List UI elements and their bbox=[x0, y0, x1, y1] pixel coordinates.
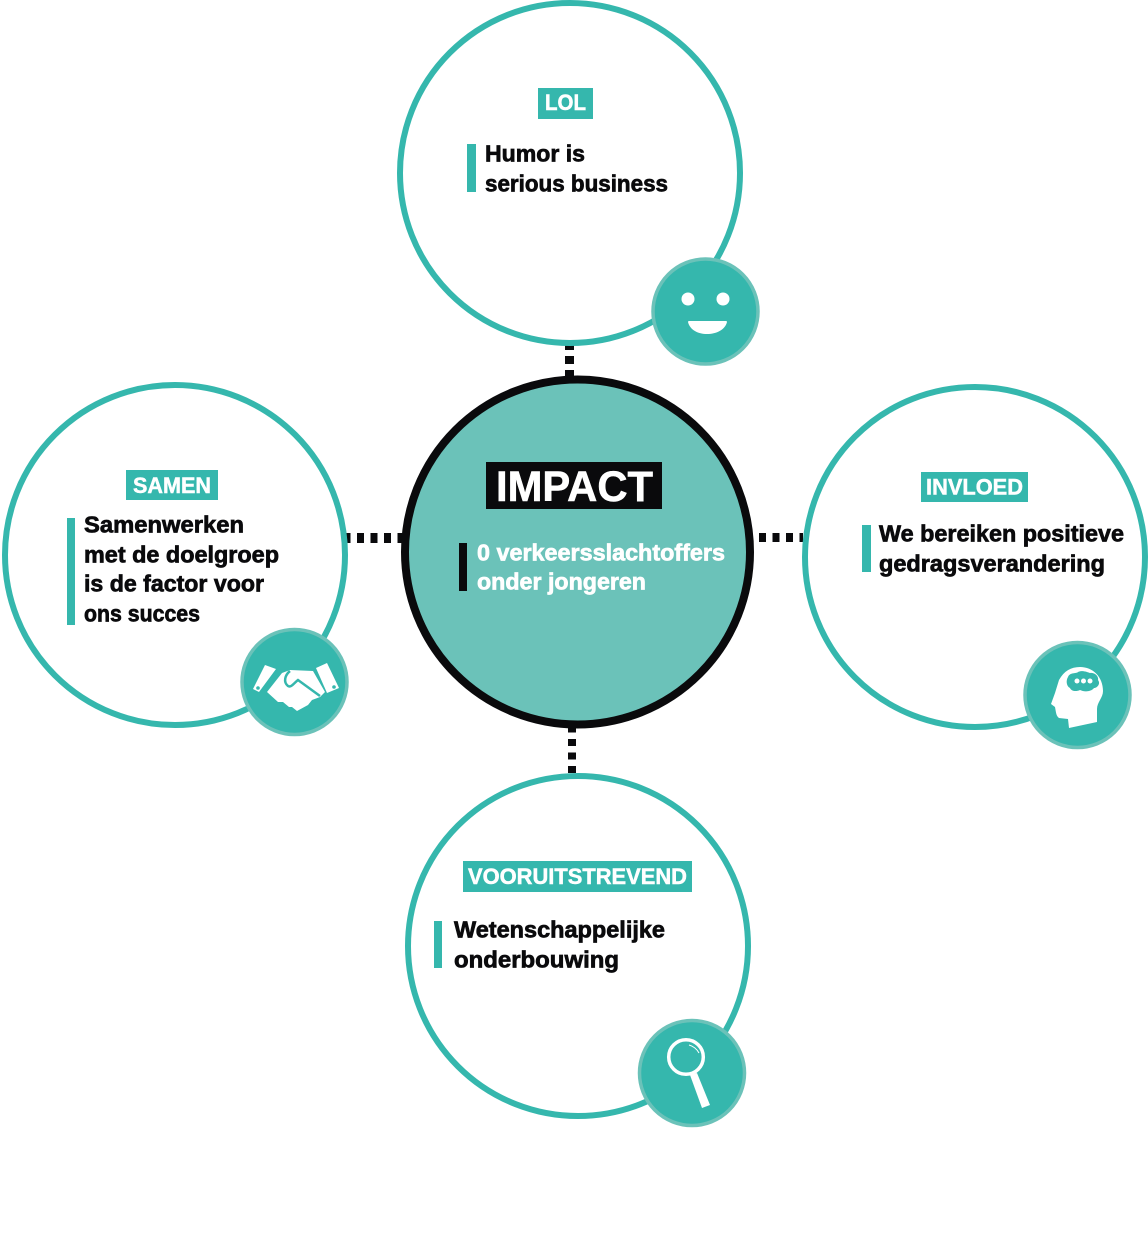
text block: samen bbox=[67, 512, 279, 626]
icon: head with thought bubble bbox=[1025, 642, 1130, 748]
connector: right bbox=[759, 533, 803, 542]
circle outline bbox=[408, 776, 748, 1116]
heading: lol: LOL bbox=[545, 90, 586, 115]
heading: lol bbox=[538, 88, 593, 119]
text block: samen: met de doelgroep bbox=[84, 542, 279, 568]
text block: samen: is de factor voor bbox=[84, 570, 264, 596]
central circle bbox=[405, 380, 750, 724]
panel: vooruitstrevend bbox=[408, 776, 748, 1126]
circle outline bbox=[805, 387, 1145, 727]
text block: invloed: We bereiken positieve bbox=[879, 520, 1124, 546]
text block: impact goal bbox=[459, 540, 725, 594]
connector: left bbox=[344, 533, 403, 543]
text block: invloed bbox=[862, 520, 1124, 576]
text block: lol: serious business bbox=[485, 170, 668, 196]
heading: samen: SAMEN bbox=[133, 473, 211, 498]
text block: vooruitstrevend: onderbouwing bbox=[454, 946, 619, 972]
panel: impact bbox=[405, 380, 750, 724]
icon: handshake bbox=[242, 630, 347, 734]
connector: bottom bbox=[568, 726, 576, 774]
text block: lol: Humor is bbox=[485, 140, 585, 166]
heading: invloed: INVLOED bbox=[926, 474, 1023, 500]
text block: vooruitstrevend bbox=[434, 916, 665, 972]
heading: vooruitstrevend: VOORUITSTREVEND bbox=[468, 864, 687, 889]
panel: invloed bbox=[805, 387, 1145, 748]
heading: impact: IMPACT bbox=[496, 463, 653, 511]
text block: invloed: gedragsverandering bbox=[879, 550, 1105, 576]
text block: samen: Samenwerken bbox=[84, 512, 244, 538]
text block: samen: ons succes bbox=[84, 600, 200, 626]
circle outline bbox=[400, 3, 740, 343]
connector: top bbox=[565, 342, 574, 378]
text block: vooruitstrevend: Wetenschappelijke bbox=[454, 916, 665, 942]
panel: lol bbox=[400, 3, 758, 364]
text block: impact goal: onder jongeren bbox=[477, 568, 646, 594]
icon: smiley bbox=[653, 259, 758, 364]
icon: magnifying glass bbox=[640, 1020, 744, 1126]
text block: impact goal: 0 verkeersslachtoffers bbox=[477, 540, 725, 566]
panel: samen bbox=[5, 385, 347, 734]
text block: lol bbox=[467, 140, 668, 196]
circle outline bbox=[5, 385, 345, 725]
